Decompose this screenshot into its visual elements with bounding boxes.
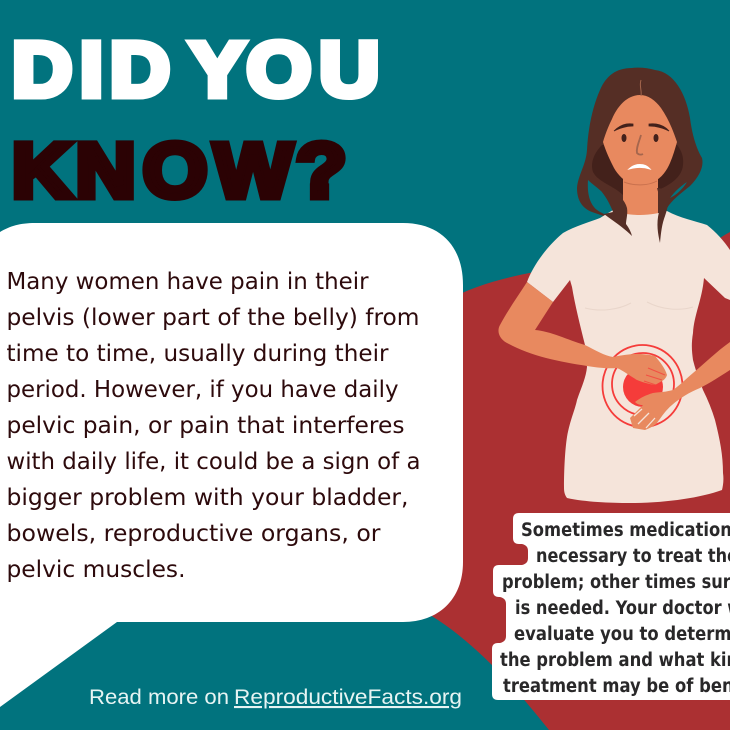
hair strand right over shirt	[657, 188, 672, 243]
neck	[623, 175, 658, 216]
body text: pelvic pain, or pain that interferes	[6, 413, 404, 439]
right arm and hand	[630, 342, 730, 430]
illustration: woman with pelvic pain	[498, 68, 730, 503]
hair parting	[639, 80, 642, 96]
pain rings	[602, 345, 682, 427]
speech bubble panel	[0, 223, 463, 707]
left hand fingers	[644, 368, 665, 385]
body text: time to time, usually during their	[6, 341, 389, 367]
left arm and hand	[498, 282, 667, 385]
nose	[637, 135, 643, 155]
hair gap left	[588, 180, 614, 215]
right hand fingers	[634, 409, 655, 428]
hair back	[577, 68, 702, 225]
red background blob	[400, 232, 730, 730]
body text: Many women have pain in their	[6, 269, 369, 295]
hair shadow	[592, 145, 683, 195]
hair gap right	[670, 182, 687, 198]
body text: bowels, reproductive organs, or	[6, 521, 381, 547]
body text: with daily life, it could be a sign of a	[6, 449, 420, 475]
read more link line: Read more on	[89, 686, 229, 709]
title line: know?: KNOW?	[12, 127, 347, 213]
eyebrows	[614, 124, 669, 131]
eyes	[622, 134, 626, 142]
body text: pelvic muscles.	[6, 557, 186, 583]
read more link line: ReproductiveFacts.org	[234, 686, 462, 709]
pain circles	[602, 345, 682, 427]
body text: period. However, if you have daily	[6, 377, 398, 403]
treatment note	[492, 513, 730, 700]
note text	[500, 520, 730, 697]
bubble shape	[0, 223, 463, 707]
pain core	[623, 367, 663, 407]
mouth	[629, 164, 650, 169]
chin shadow	[624, 181, 657, 185]
body text	[6, 269, 420, 583]
shirt	[527, 210, 730, 503]
body text: pelvis (lower part of the belly) from	[6, 305, 420, 331]
title	[12, 26, 379, 213]
face	[603, 95, 677, 184]
note highlight background	[492, 513, 730, 700]
hair strand left over shirt	[602, 188, 632, 236]
title line: did you: DID YOU	[12, 26, 379, 112]
body text: bigger problem with your bladder,	[6, 485, 409, 511]
chest lines	[585, 302, 693, 310]
read more link line	[89, 686, 462, 709]
